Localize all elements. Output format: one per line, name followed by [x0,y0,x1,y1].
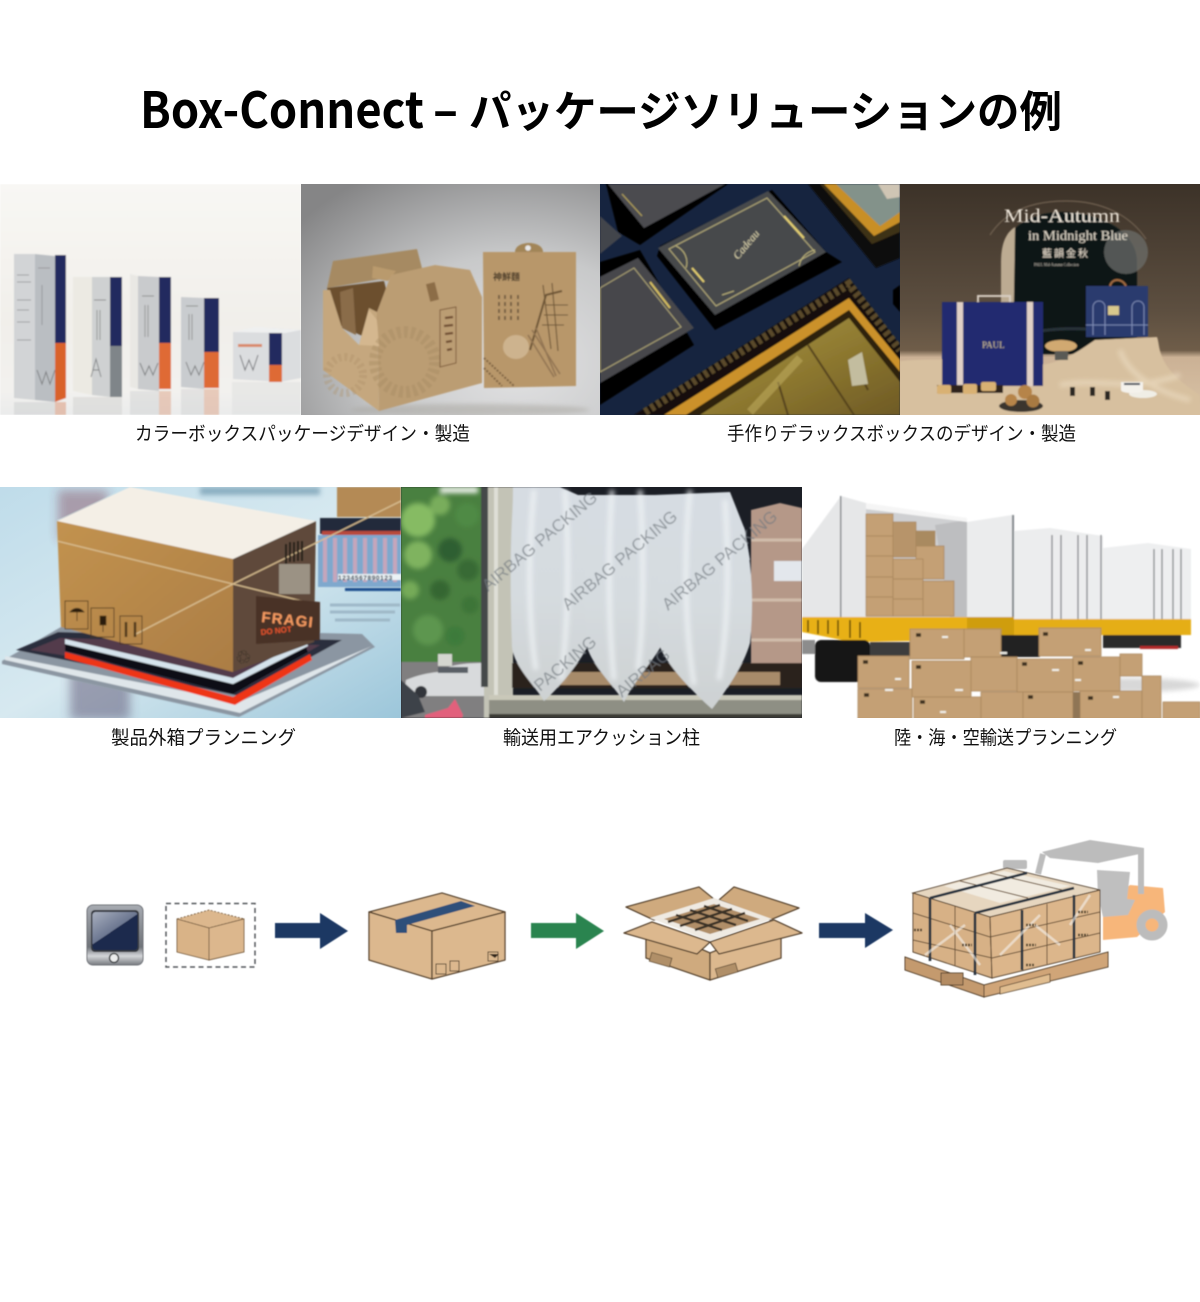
main box [657,190,842,330]
title [140,71,1062,143]
caption: air cushion column: 輸送用エアクッション柱 [503,723,700,750]
title: パッケージソリューションの例 [469,78,1062,140]
photo: kraft gift boxes [301,184,600,416]
monitor: 1234567890123 [338,575,393,582]
heading text in photo [1004,206,1128,267]
photo: outer carton planning [0,487,401,720]
box 3 [130,274,171,391]
icon: open carton with cushioned interior [624,887,802,980]
upper left box [600,184,728,254]
fragile label [256,596,320,644]
lower left box [600,250,694,405]
pastries and teaware [937,340,1157,412]
photo: land, sea and air transport [802,487,1200,719]
heading text in photo: Mid-Autumn [1004,206,1121,227]
fragile label: FRAGI [261,609,315,631]
lower gilded frame [634,278,900,415]
main box: Cadeau [731,228,763,262]
icon: stretch-wrapped pallet [905,868,1108,997]
air bag watermarks: PACKING [530,632,600,695]
photo: Mid-Autumn deluxe gift set [900,184,1200,415]
main carton [57,487,401,672]
arch alcove [1001,212,1137,354]
background carton [337,487,401,517]
title: Box-Connect [140,71,424,143]
icon: taped carton [369,893,505,979]
rear trucks [1014,528,1191,649]
upper right frame [808,184,900,268]
monitor [318,535,401,620]
photo: deluxe black and gold boxes [600,184,900,415]
cartons inside trailer [866,514,954,616]
caption: transport planning: 陸・海・空輸送プランニング [894,723,1117,750]
icon: tablet [87,905,143,965]
arrow: navy step 3 [819,913,893,948]
box 1 [14,254,66,402]
lead truck open trailer [802,496,1014,617]
title: – [433,71,458,143]
air bag watermarks: AIRBAG [612,645,674,701]
caption: outer carton planning: 製品外箱プランニング [111,723,296,750]
small blue box [1086,280,1148,337]
handling icons [65,601,142,644]
photo: color box cosmetic packages [0,184,301,415]
silver platform [2,627,375,717]
large blue suitcase: PAUL [982,340,1005,350]
hanging pouch [515,243,543,252]
barcode label [279,564,310,594]
large blue suitcase [942,296,1043,386]
container frame [484,487,513,718]
icon: forklift behind pallet [1003,840,1165,940]
arrow: green step 2 [531,913,604,949]
heading text in photo: 藍韻金秋 [1042,247,1090,260]
heading text in photo: in Midnight Blue [1028,229,1128,244]
box body [377,265,482,411]
photo: transport air cushion column [401,487,802,718]
foreground carton stack [858,628,1200,719]
lid flap [327,249,423,344]
caption: color box design: カラーボックスパッケージデザイン・製造 [135,419,470,446]
air bag watermarks: AIRBAG PACKING [658,507,781,614]
draped table [900,336,1172,412]
cargo [512,503,802,688]
red and black base layers [65,652,312,705]
photo: kraft gift boxes: 神鮮麵 [493,270,520,283]
air bag watermarks [478,488,781,701]
trees [401,487,485,718]
box 2 [73,277,122,397]
arrow: navy step 1 [275,913,348,949]
fragile label: DO NOT [260,625,292,637]
box 5 [233,327,301,382]
box 4 [181,297,219,389]
icon: small carton in dashed outline [166,904,255,967]
main carton: ♲ [234,648,252,667]
air bag watermarks: AIRBAG PACKING [478,488,601,595]
air bag watermarks: AIRBAG PACKING [558,507,681,614]
heading text in photo: PAUL Mid-Autumn Collection [1034,263,1079,267]
silver cars and pink pallet jack [401,654,484,718]
process flow diagram [87,840,1165,997]
yellow chassis and wheels [802,617,1040,682]
air cushion bags [511,487,752,709]
caption: deluxe box design: 手作りデラックスボックスのデザイン・製造 [727,419,1076,446]
